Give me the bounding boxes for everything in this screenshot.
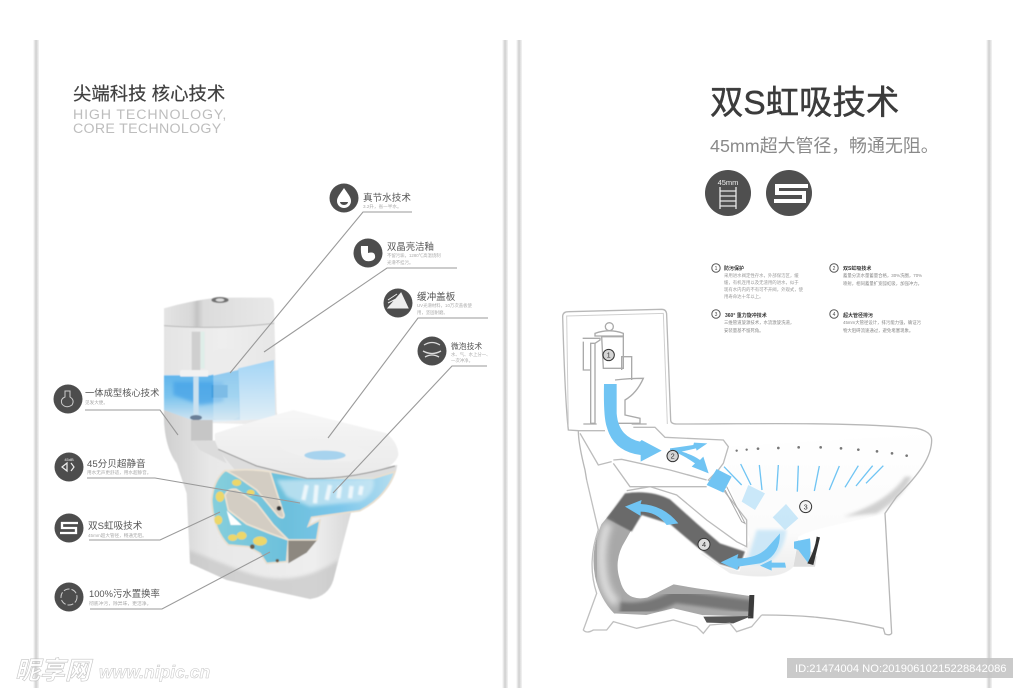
cistern lid [164,298,274,327]
callout: water saving: 真节水技术 [363,192,411,204]
flow number markers: 1 [607,351,611,360]
callout: silent: 45分贝超静音 [87,458,146,470]
note 1: 缓，有机连用以及无渣用的进水，似于 [724,279,799,286]
note 2: 双S虹吸技术 [843,265,871,272]
flush valve [583,323,647,424]
icon: cycle [54,582,84,612]
cross-section diagram [563,309,932,635]
heading: right title: 45mm超大管径，畅通无阻。 [710,136,939,156]
callout: glaze [354,238,441,268]
callout: glaze: 不留污垢，1280℃高温烧制 [387,252,441,259]
icon: S trap [766,170,812,216]
bowl band [218,450,397,517]
toilet seat [215,410,398,479]
callout: glaze: 光滑不挂污。 [387,259,413,266]
flow number markers [603,349,812,550]
siphon pipe [583,480,762,633]
callout: soft close lid: 缓冲盖板 [417,291,456,303]
flow number markers: 2 [671,452,675,461]
dots row [735,446,908,457]
note 4: 超大管径排污 [843,312,873,319]
note 3: 安装量基不留死角。 [724,327,764,334]
watermark: id label [787,658,1013,678]
watermark: id label: ID:21474004 NO:20190610215228842086 [795,663,1007,675]
heading: left title: HIGH TECHNOLOGY, [73,107,227,123]
heading: right title [710,85,939,156]
panel: left page [33,40,508,688]
callout: water saving: 3.2升，省一半水。 [363,203,402,210]
icon: sound: 45dB [64,457,74,462]
callout: one piece [54,384,159,414]
note 1: 用寿命达十年以上。 [724,293,764,300]
water level [164,360,275,425]
note 3 [712,310,794,334]
text block: feature notes [712,264,922,334]
callout: silent [54,452,151,482]
watermark: site logo [15,657,210,685]
note 1: 采用进水阀定性存水，外部保洁区，缓 [724,272,799,279]
heading: left title [73,83,227,137]
note 4: 物大阻碍流速通过，避免堵塞现象。 [843,327,913,334]
callout: siphon: 双S虹吸技术 [88,520,143,532]
icon: 45mm pipe: 45mm [718,178,738,187]
icon: S siphon [54,514,84,542]
diamonds: swirl [742,485,798,530]
callout: silent: 用水无声更舒适，用水超静音。 [87,469,151,476]
note 3: 3 [715,312,718,318]
arrows: rim jets [724,464,883,492]
icon: water drop [330,184,358,212]
icon: glaze [354,238,382,268]
callout: soft close lid [384,288,472,318]
icon: one piece toilet [54,384,82,414]
note 2: 2 [833,266,836,272]
flow number markers: 4 [702,540,706,549]
watermark: site logo: 昵享网 [15,657,94,685]
note 1 [712,264,804,300]
bowl interior [700,433,930,577]
callout: soft close lid: UV光滑材料，10万次盖板使 [417,302,472,309]
note 3: 三维管道旋源技术，水流激旋洗道， [724,319,794,326]
callout: replacement rate [54,582,160,612]
flow number markers: 3 [804,502,808,511]
note 1: 1 [715,266,718,272]
note 4: 4 [833,312,836,318]
callout: siphon: 45mm超大管径，畅通无阻。 [88,532,147,539]
heading: right title: 双S虹吸技术 [710,85,899,122]
toilet outline [563,309,932,635]
callout: one piece: 一体成型核心技术 [85,387,159,398]
note 3: 360° 重力旋冲技术 [725,312,767,319]
callout: soft close lid: 用，坚固耐磨。 [417,309,448,316]
note 2: 喷射，相同蓄量扩宽弧虹吸，加强冲力。 [843,280,922,287]
callout: replacement rate: 100%污水置换率 [89,588,160,599]
callout: micro bubble: 一次冲净。 [451,357,473,364]
siphon trap [227,470,284,518]
icon: 45mm pipe [705,170,751,216]
watermark: site logo: www.nipic.cn [99,662,210,682]
note 2: 蓄量分流水量蓄量合格，30%洗圈，70% [843,272,922,279]
callout: glaze: 双晶亮洁釉 [387,241,434,252]
callout: water saving [330,184,411,212]
callout: micro bubble [418,336,491,366]
note 1: 防污保护 [724,265,744,272]
icon: bubbles [418,336,446,366]
arrows: water flow [604,384,811,571]
cut-away water [212,471,395,563]
cistern [164,297,280,425]
note 2 [830,264,922,287]
panel: right page [516,40,992,688]
callout: replacement rate: 彻底冲污，除异味，更洁净。 [89,600,151,607]
cut section wedge [288,541,317,563]
note 1: 现有水内内的不有可不开阀，外观式，使 [724,286,804,293]
callout: one piece: 见发大便。 [85,399,108,406]
callout: siphon [54,514,147,542]
waste particles [214,479,267,546]
heading: left title: 尖端科技 核心技术 [73,83,225,104]
icon: lid [384,288,412,318]
note 4: 45mm大管径设计，排污能力强，确证污 [843,319,922,326]
toilet body [164,410,352,599]
product toilet illustration [164,297,398,603]
leader lines [85,212,488,609]
note 4 [830,310,922,334]
heading: left title: CORE TECHNOLOGY [73,121,222,137]
callout: micro bubble: 水、气、水上分一、 [451,351,491,358]
callout: micro bubble: 微泡技术 [451,341,482,351]
pipe: S trap and drain [592,492,754,623]
